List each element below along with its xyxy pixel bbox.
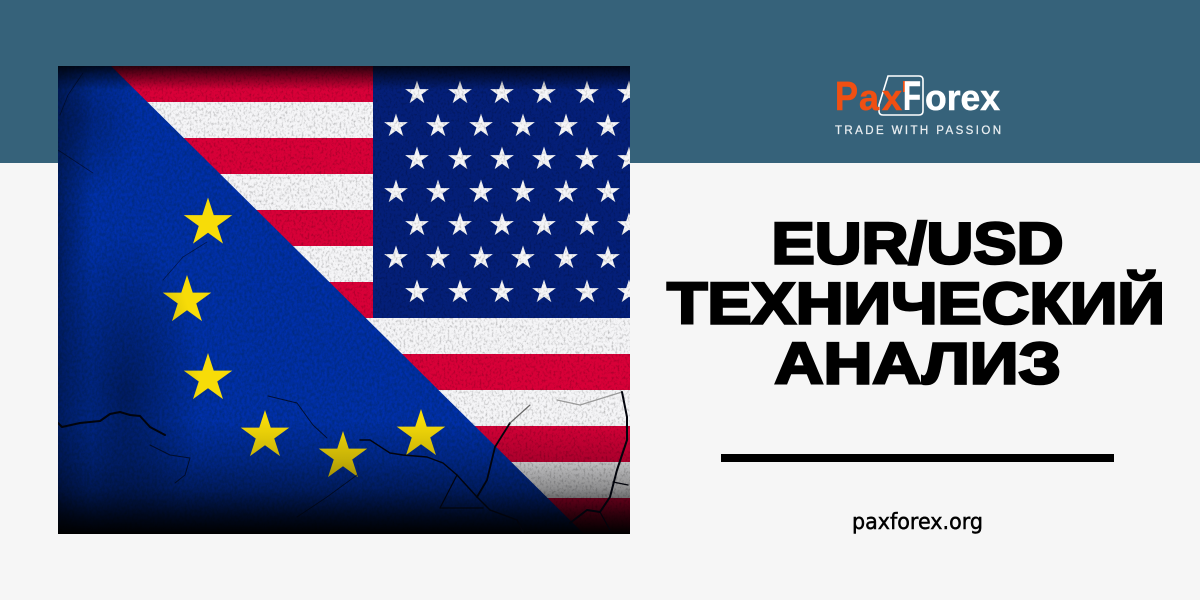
logo wordmark: x (882, 77, 902, 118)
title (667, 212, 1165, 396)
title: АНАЛИЗ (774, 332, 1061, 396)
logo wordmark: P (835, 73, 858, 119)
logo wordmark: a (859, 77, 880, 118)
logo: PaxForex (835, 73, 1001, 137)
logo wordmark (835, 73, 1000, 119)
logo tagline: TRADE WITH PASSION (835, 125, 1001, 137)
header band (0, 0, 1200, 163)
logo wordmark: F (903, 73, 921, 119)
flag image: EU and USA split diagonally (58, 66, 630, 534)
heavier grunge texture on EU flag (58, 68, 558, 516)
wall cracks (58, 73, 628, 532)
title: EUR/USD (772, 212, 1064, 276)
EU flag triangle (58, 66, 584, 534)
shading and vignette (58, 66, 630, 534)
website url: paxforex.org (852, 510, 983, 535)
EU yellow stars (163, 198, 445, 477)
US flag stripes (58, 66, 630, 534)
logo frame (879, 76, 923, 115)
logo wordmark: orex (925, 77, 1000, 118)
divider rule (721, 454, 1114, 462)
title: ТЕХНИЧЕСКИЙ (667, 272, 1165, 336)
US flag canton with white stars (373, 66, 641, 318)
light grunge texture on US flag (115, 66, 630, 519)
